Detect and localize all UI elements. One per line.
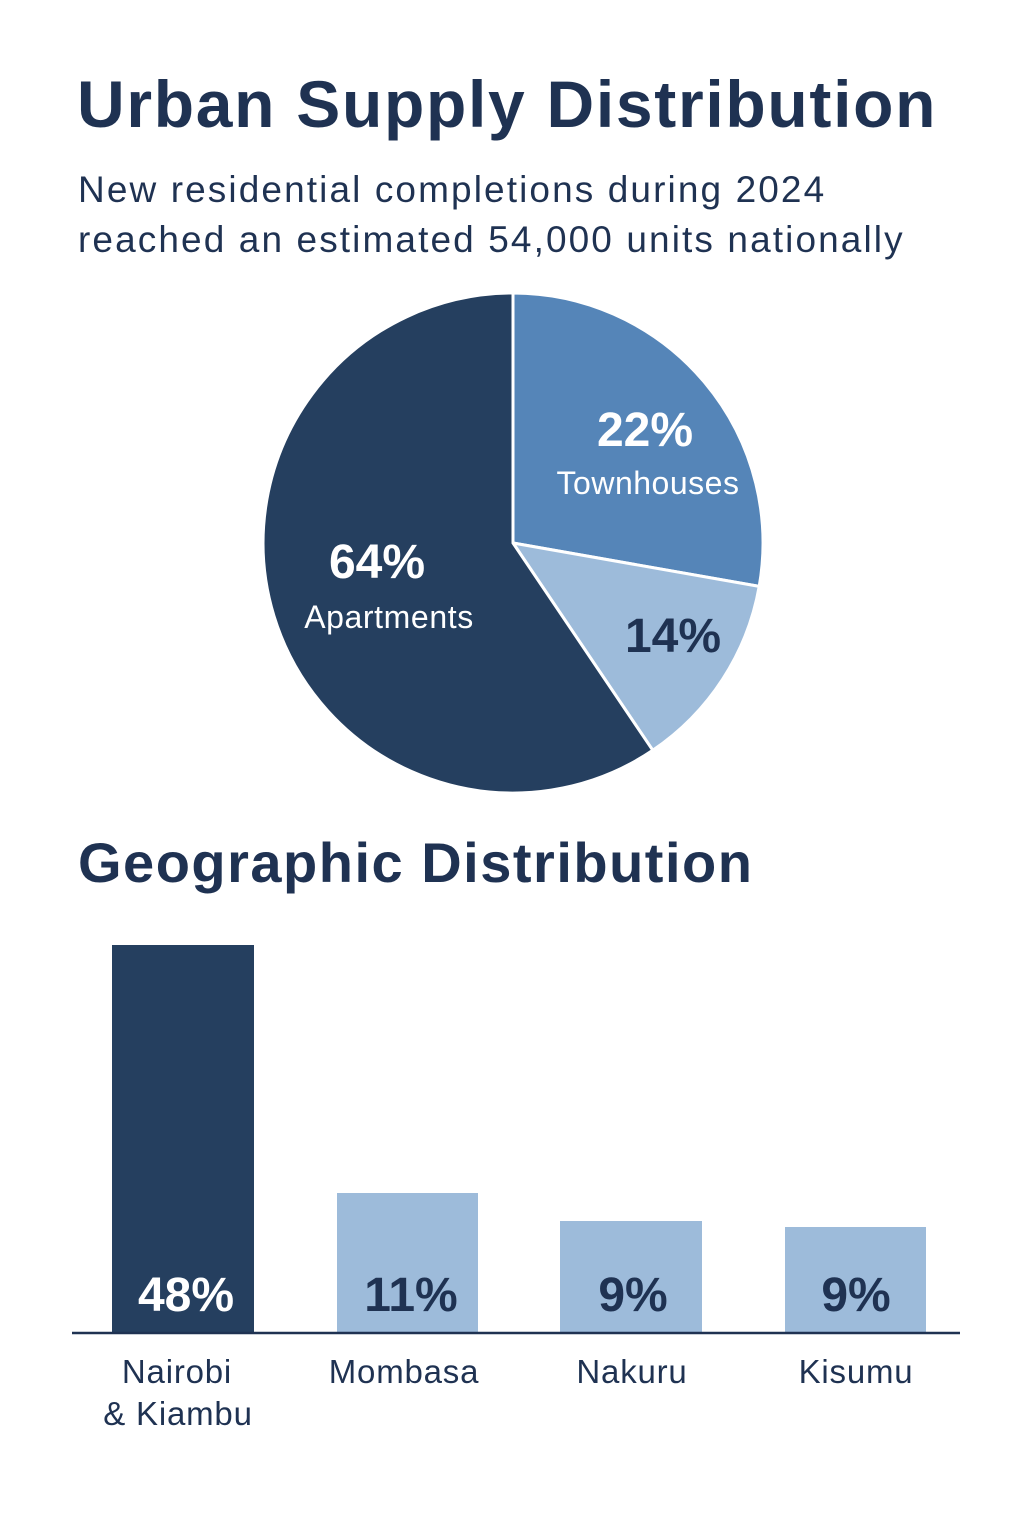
- bar chart: [72, 945, 960, 1432]
- pie chart: 64%: [329, 536, 425, 589]
- pie chart: Townhouses: [557, 465, 739, 501]
- bar chart: 9%: [821, 1269, 891, 1322]
- bar chart: 11%: [364, 1269, 458, 1322]
- pie chart: 14%: [625, 610, 721, 663]
- pie chart: 22%: [597, 404, 693, 457]
- subtitle: New residential completions during 2024: [78, 169, 826, 210]
- section heading: Geographic Distribution: [78, 831, 753, 894]
- title: Urban Supply Distribution: [77, 67, 937, 141]
- bar chart: Kisumu: [799, 1353, 913, 1390]
- bar chart: Mombasa: [329, 1353, 479, 1390]
- pie chart: Apartments: [304, 599, 474, 635]
- bar chart: & Kiambu: [103, 1395, 253, 1432]
- subtitle: [78, 169, 905, 260]
- bar chart: 48%: [138, 1269, 234, 1322]
- bar chart: 9%: [598, 1269, 668, 1322]
- bar chart: Nakuru: [576, 1353, 688, 1390]
- bar chart: Nairobi: [122, 1353, 232, 1390]
- subtitle: reached an estimated 54,000 units nationally: [78, 219, 905, 260]
